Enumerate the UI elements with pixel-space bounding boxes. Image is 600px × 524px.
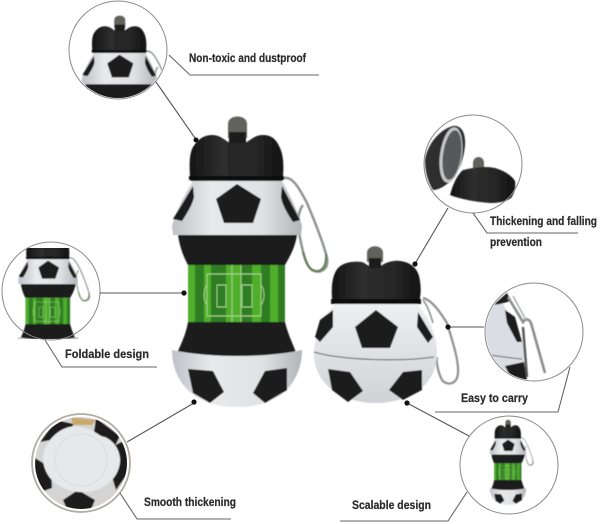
label [340, 492, 467, 521]
callout: thickening and falling prevention [412, 115, 597, 267]
label [169, 53, 319, 75]
connector line and dot [445, 324, 484, 330]
magnifier circle: carabiner close-up [480, 283, 583, 385]
label: Smooth thickening [144, 497, 236, 509]
connector line and dot [127, 399, 197, 442]
magnifier circle: bottle base [32, 414, 130, 512]
label: Easy to carry [461, 393, 529, 405]
label: Foldable design [65, 349, 149, 361]
label: Scalable design [352, 500, 431, 512]
label [45, 340, 157, 367]
callout: foldable design [2, 230, 187, 367]
label [435, 367, 570, 412]
connector line and dot [404, 400, 469, 436]
callout: smooth thickening [32, 399, 236, 519]
magnifier circle: bottle cap close-up [68, 0, 168, 100]
big football bottle [172, 116, 327, 407]
small collapsed football bottle [314, 246, 458, 403]
magnifier circle: extended bottle [460, 416, 558, 514]
callout: scalable design [340, 400, 558, 521]
callout: easy to carry [435, 283, 583, 412]
label [473, 213, 597, 249]
label: prevention [490, 237, 542, 249]
callout: non-toxic and dustproof [68, 0, 319, 142]
label [120, 493, 236, 519]
connector line and dot [100, 290, 187, 296]
connector line and dot [412, 208, 448, 267]
magnifier circle: open lid [424, 115, 522, 213]
connector line and dot [156, 82, 198, 142]
label: Non-toxic and dustproof [189, 53, 306, 65]
magnifier circle: full bottle [2, 242, 100, 340]
